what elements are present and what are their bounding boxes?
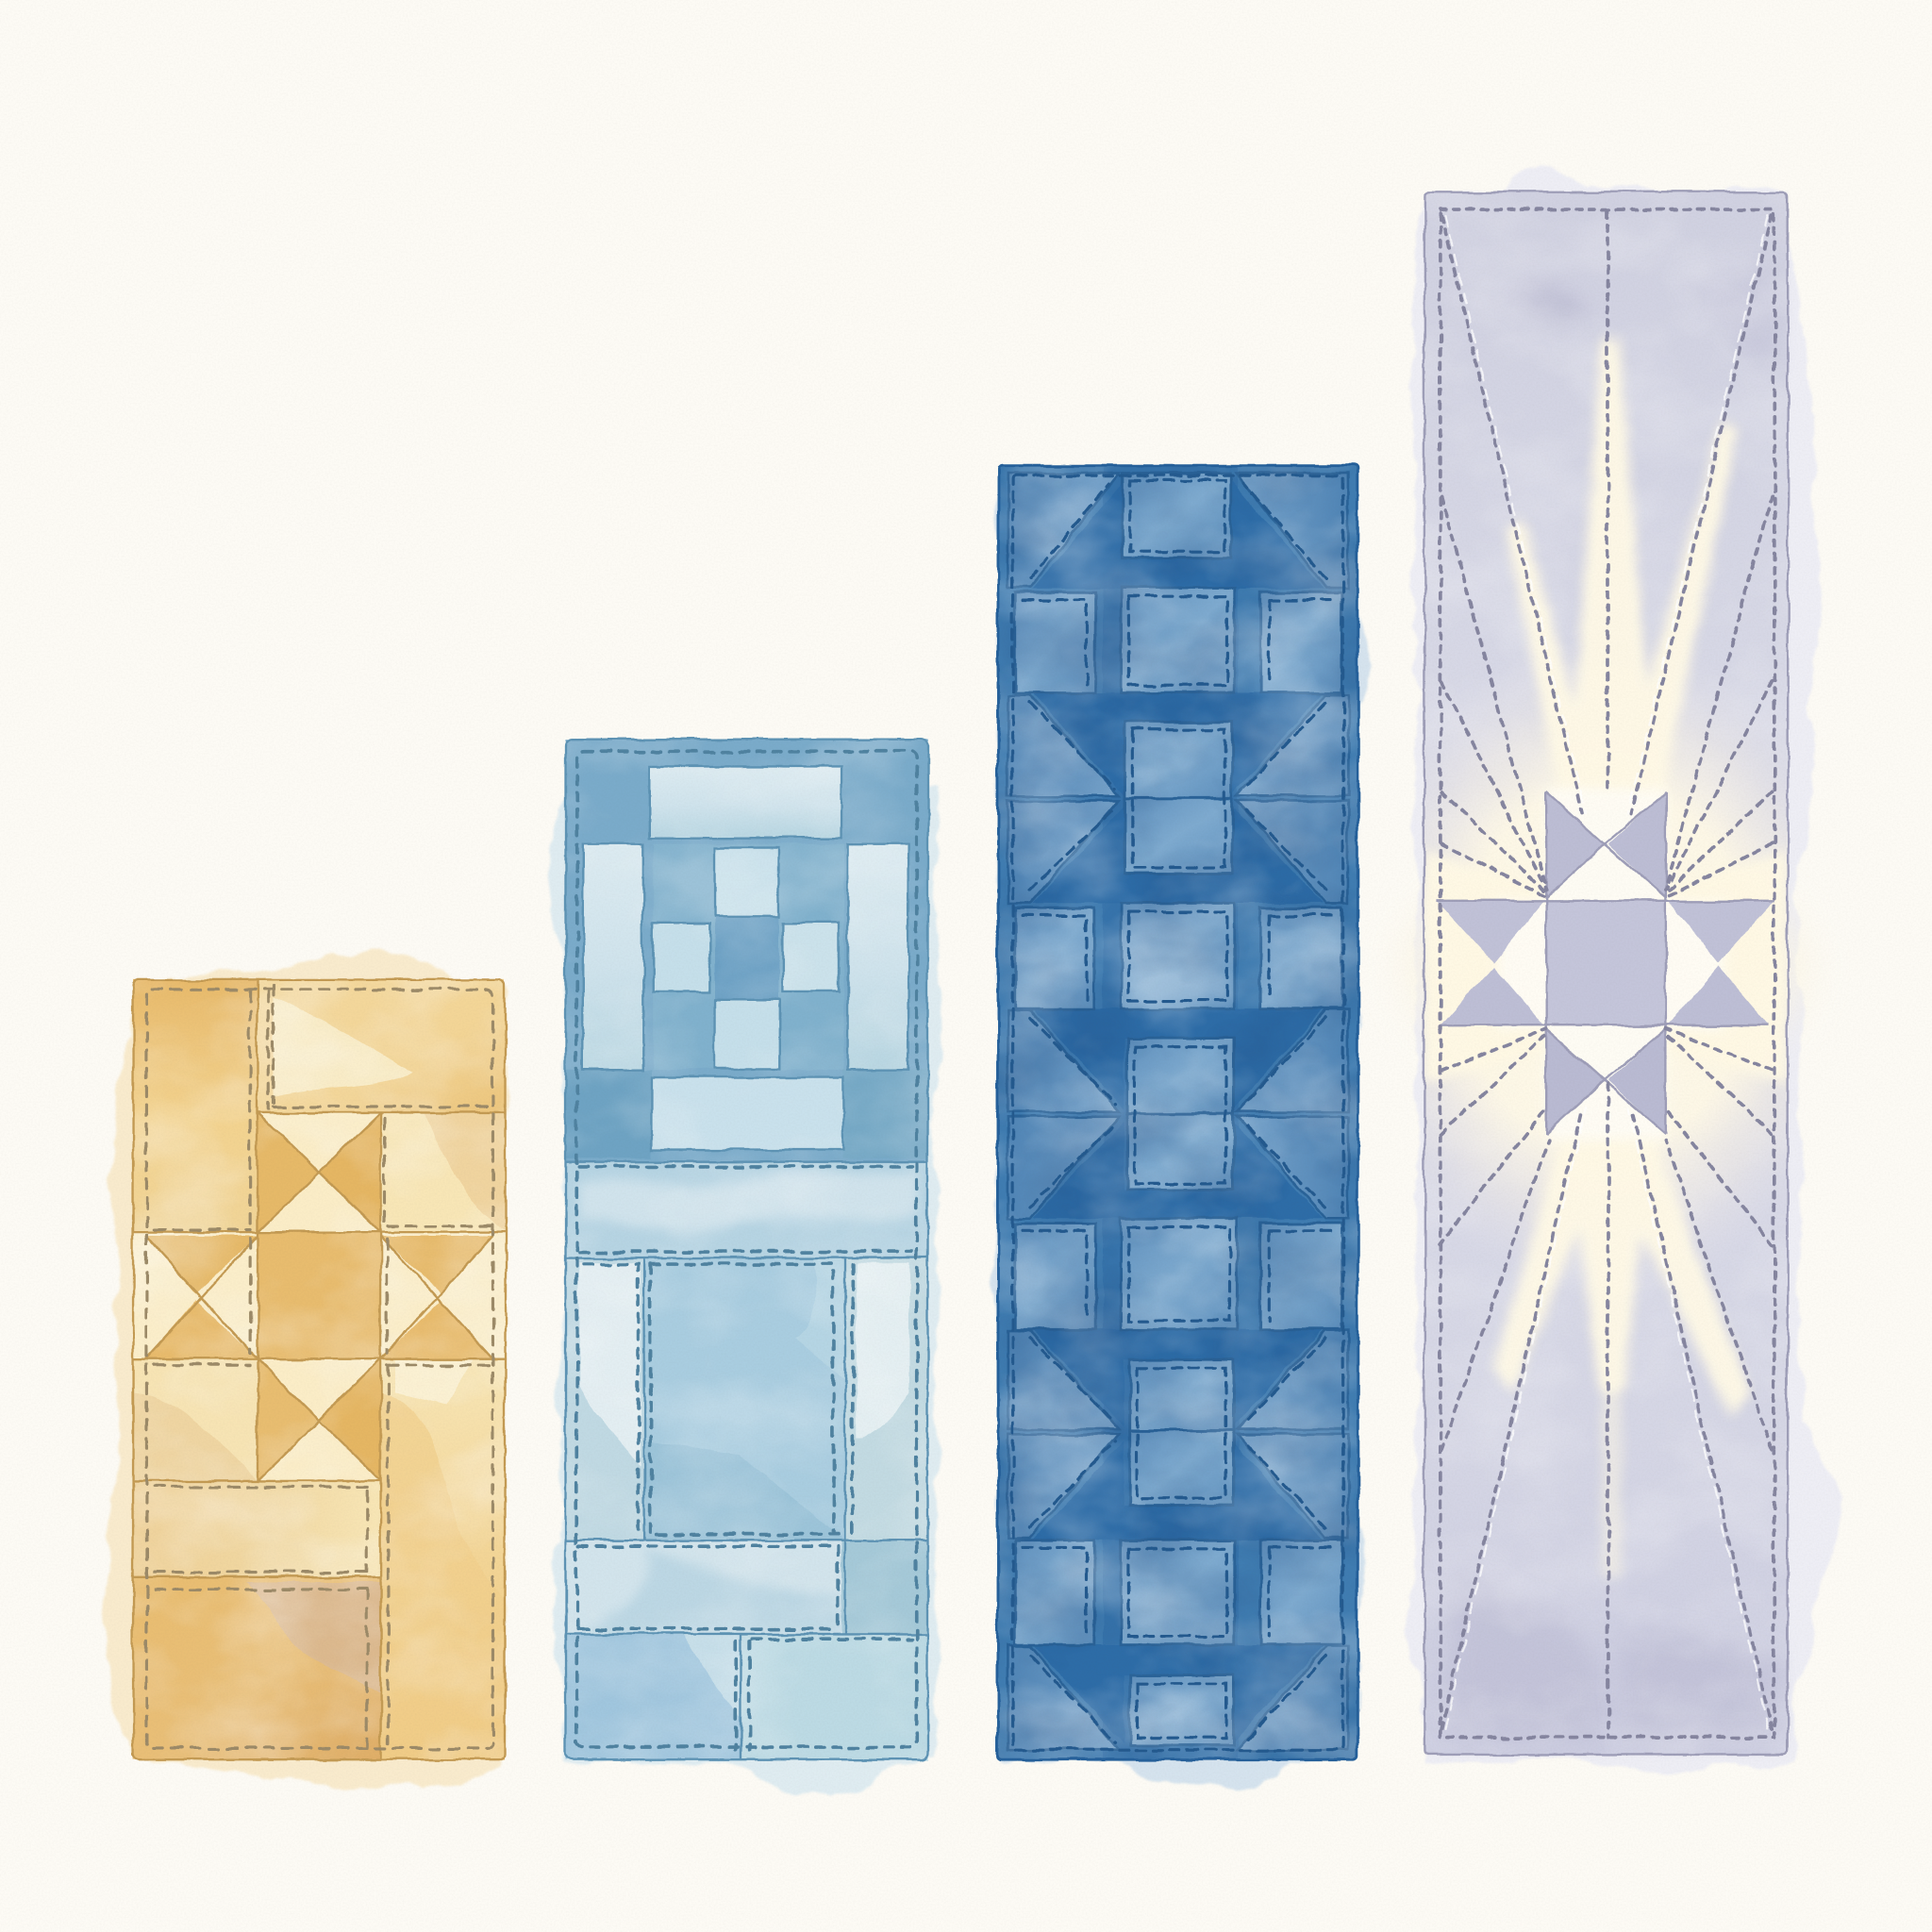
deep blue watercolor wash: [990, 471, 1368, 1790]
panel: deep blue quilt bar: [990, 466, 1368, 1790]
lavender quilt body: [1424, 192, 1788, 1755]
panel: lavender quilt bar with glowing star: [1402, 167, 1839, 1771]
light blue watercolor wash: [549, 789, 941, 1794]
panel: amber quilt bar: [101, 950, 508, 1790]
central glow: [1424, 192, 1788, 1755]
deep blue edge: [998, 466, 1357, 1759]
light blue quilt patches: [566, 740, 928, 1759]
star centre white: [1497, 789, 1725, 1140]
lavender watercolor wash: [1407, 167, 1839, 1771]
light blue stitching: [576, 752, 917, 1750]
deep blue light triangles: [1008, 474, 1119, 1750]
deep blue quilt base: [998, 466, 1357, 1759]
star block: [1437, 792, 1774, 1134]
amber quilt patches: [133, 979, 506, 1759]
deep blue stitching: [1013, 475, 1343, 1750]
panel: light blue quilt bar: [549, 740, 941, 1794]
amber seams: [133, 979, 506, 1759]
amber stitching: [146, 986, 492, 1750]
light blue seams: [566, 740, 928, 1759]
deep blue dark triangles: [1033, 480, 1324, 1743]
outer glow: [1402, 857, 1808, 1078]
lavender stitching: [1440, 209, 1774, 1738]
amber watercolor wash: [101, 950, 508, 1790]
light rays: [1424, 339, 1788, 1577]
star halo: [1424, 192, 1788, 1755]
lavender quilt edge: [1424, 192, 1788, 1755]
deep blue square patches: [1015, 474, 1341, 1744]
